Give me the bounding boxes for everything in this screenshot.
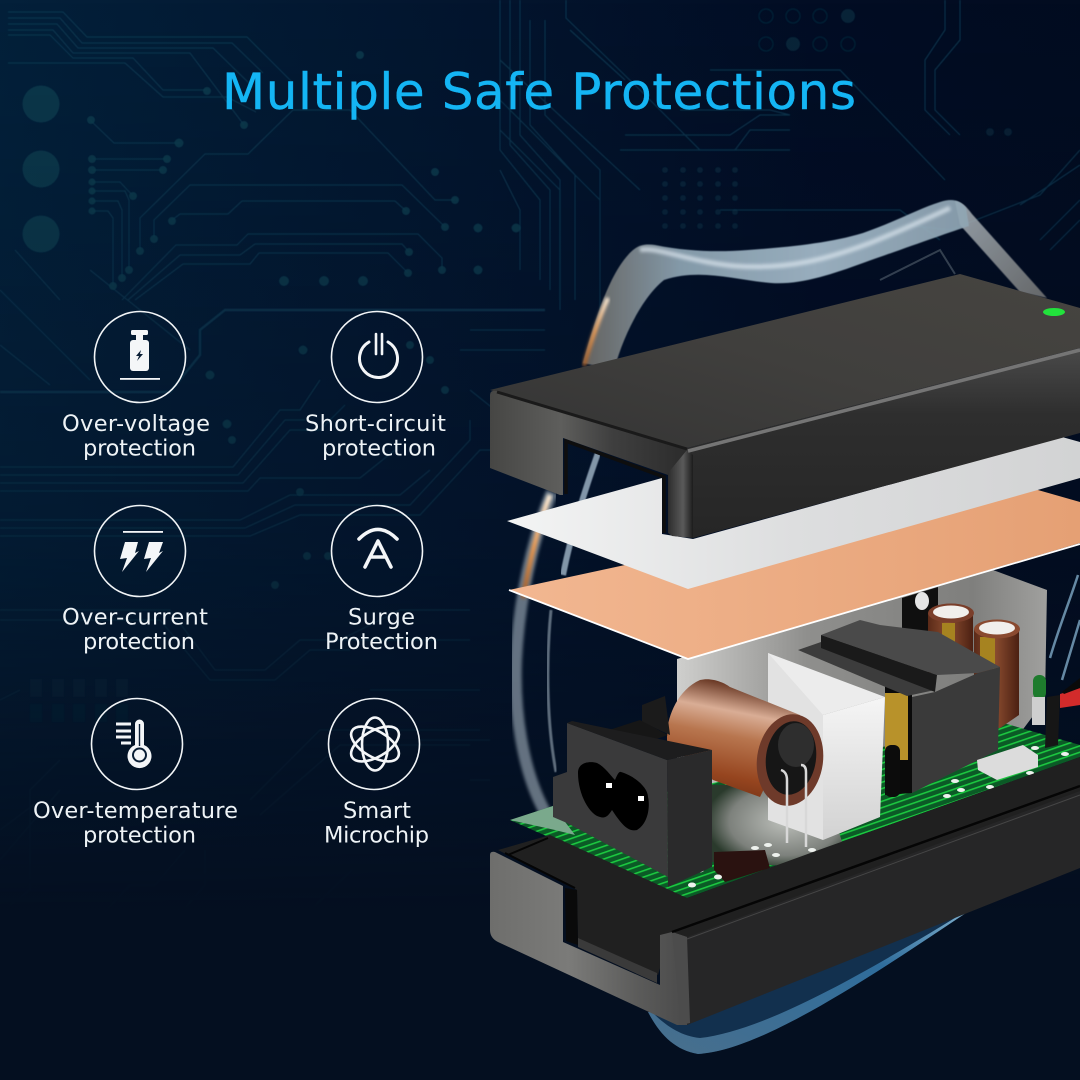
ac socket <box>553 696 712 887</box>
shield highlight <box>640 208 950 267</box>
feature: over-current protection: Over-current <box>62 604 208 630</box>
feature: short-circuit protection: protection <box>322 436 436 462</box>
indicator led <box>1043 308 1065 316</box>
protection feature grid <box>33 312 446 848</box>
lid top face <box>490 274 1080 448</box>
shield right line <box>1050 575 1080 680</box>
feature: surge protection <box>325 506 438 655</box>
shield left inner line <box>548 610 556 772</box>
icon: thermometer <box>116 720 152 768</box>
bottom case <box>490 757 1080 1025</box>
shield left inner strip <box>563 453 598 575</box>
capacitor small right <box>974 620 1020 728</box>
feature: surge protection: Surge <box>348 604 415 630</box>
shield right strip <box>955 201 1047 298</box>
feature: smart microchip <box>324 698 429 848</box>
case left face <box>490 852 687 1025</box>
icon: arc and letter A <box>359 530 397 567</box>
icon: power button <box>360 334 398 377</box>
top case lid <box>490 274 1080 538</box>
title: Multiple Safe Protections <box>222 63 856 121</box>
shield inner line <box>880 250 955 280</box>
feature: short-circuit protection: Short-circuit <box>305 411 446 437</box>
decorative circles and pads <box>22 9 1012 722</box>
feature: smart microchip: Smart <box>343 798 411 824</box>
electrolytic capacitor <box>667 679 829 847</box>
feature: over-temperature protection <box>33 698 238 848</box>
copper sheet <box>509 482 1080 659</box>
feature: surge protection: Protection <box>325 629 438 655</box>
shield left side <box>516 492 552 812</box>
shield glass top band <box>583 200 969 370</box>
shield bottom glass <box>648 890 1000 1054</box>
charger product exploded view <box>490 274 1080 1025</box>
metal back plate <box>677 570 1047 820</box>
feature: over-current protection <box>62 506 208 655</box>
white insulation sheet <box>507 437 1080 589</box>
feature: over-current protection: protection <box>83 629 195 655</box>
icon: double lightning <box>120 531 163 572</box>
feature: smart microchip: Microchip <box>324 822 429 848</box>
capacitor small left <box>928 604 974 673</box>
shield outline behind product <box>516 200 1080 1054</box>
shield orange rim <box>584 298 608 366</box>
lid notch frame <box>566 441 664 533</box>
lid edge highlights <box>688 350 1080 451</box>
feature: over-temperature protection: Over-temperature <box>33 798 238 824</box>
small components right <box>977 675 1080 780</box>
transformer black <box>798 620 1000 797</box>
icon: weight with bolt <box>120 330 160 380</box>
icon: atom <box>346 718 404 770</box>
feature: over-voltage protection <box>62 312 210 462</box>
lid front face <box>687 348 1080 538</box>
feature: over-voltage protection: Over-voltage <box>62 411 210 437</box>
case notch <box>565 888 578 945</box>
case front face <box>687 791 1080 1025</box>
case interior wall <box>498 757 1080 975</box>
shield bottom glass rim <box>648 890 1000 1054</box>
feature: over-temperature protection: protection <box>83 822 196 848</box>
socket hole <box>578 762 649 830</box>
feature: short-circuit protection <box>305 312 446 462</box>
transformer white <box>768 653 885 840</box>
feature: over-voltage protection: protection <box>83 436 196 462</box>
shield lower orange rim <box>523 495 550 598</box>
lid notch pillar <box>668 450 693 538</box>
pcb board <box>510 722 1080 898</box>
case rim line <box>505 838 575 888</box>
lid left face <box>490 391 693 495</box>
